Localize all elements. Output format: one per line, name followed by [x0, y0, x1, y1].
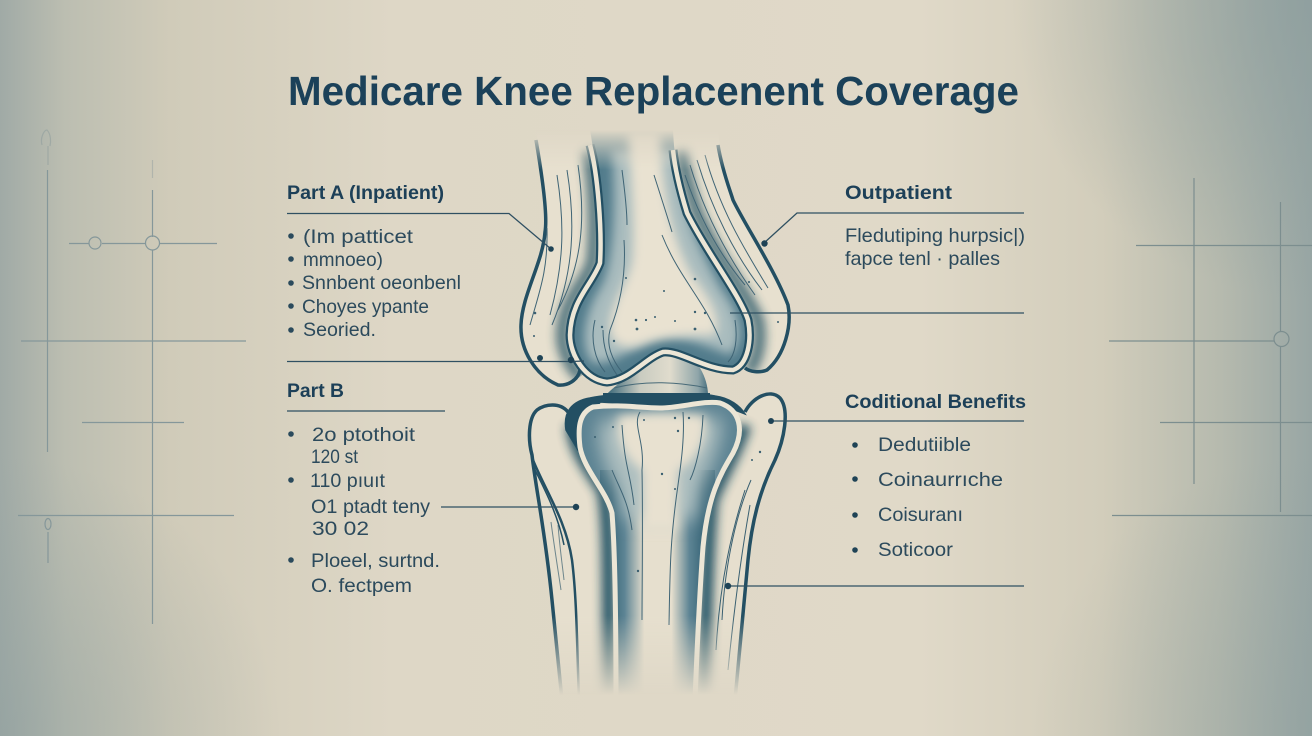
bullet list: benefits — [852, 434, 1003, 561]
bullet list: Part B: 120 st — [311, 446, 359, 468]
panel: Part B — [287, 380, 440, 597]
text block: Outpatient description — [845, 225, 1025, 270]
right decorative grid — [1109, 178, 1312, 516]
callout leader lines — [287, 213, 1024, 586]
bullet list: Part B: O1 ptadt teny — [311, 496, 430, 518]
bullet list: Part A — [288, 226, 461, 341]
tibia head cap — [565, 393, 745, 450]
tibia side bones — [529, 394, 785, 700]
femur lateral lobes — [521, 130, 789, 385]
femur central shaft — [533, 130, 779, 382]
heading: Outpatient: Outpatient — [845, 182, 953, 204]
cartilage speckles — [533, 277, 779, 342]
bullet list: benefits: Coinaurrıche — [878, 469, 1003, 491]
heading: Coditional Benefits: Coditional Benefits — [845, 391, 1026, 413]
callout anchor dots — [537, 240, 774, 589]
bullet list: Part B: 30 02 — [312, 518, 369, 540]
bullet list: benefits: Dedutiible — [878, 434, 971, 456]
panel: Part A inpatient — [287, 182, 461, 341]
title: Medicare Knee Replacenent Coverage — [288, 68, 1019, 114]
bullet list: Part A: Snnbent oeonbenl — [302, 272, 461, 294]
bullet list: Part B — [288, 424, 440, 597]
left decorative grid — [18, 130, 246, 624]
neck cartilage — [603, 357, 710, 395]
bullet list: Part A: Choyes ypante — [302, 296, 429, 318]
text block: Outpatient description: Fledutiping hurpsic|) — [845, 225, 1025, 247]
panel: Coditional Benefits — [845, 391, 1026, 561]
panel: Outpatient — [845, 182, 1025, 270]
bullet list: Part B: O. fectpem — [311, 575, 412, 597]
bullet list: Part A: Seoried. — [303, 319, 376, 341]
text block: Outpatient description: fapce tenl · palles — [845, 248, 1000, 270]
bullet list: benefits: Coisuranı — [878, 504, 963, 526]
heading: Part B: Part B — [287, 380, 344, 402]
tibia central shaft — [579, 402, 761, 705]
bullet list: Part A: mmnoeo) — [303, 249, 383, 271]
bullet list: Part B: 110 pıuıt — [310, 470, 386, 492]
bullet list: benefits: Soticoor — [878, 539, 954, 561]
bullet list: Part A: (Im patticet — [303, 226, 414, 248]
knee joint illustration — [521, 130, 789, 705]
bullet list: Part B: 2o ptothoit — [312, 424, 416, 446]
heading: Part A: Part A (Inpatient) — [287, 182, 444, 204]
bullet list: Part B: Ploeel, surtnd. — [311, 550, 440, 572]
